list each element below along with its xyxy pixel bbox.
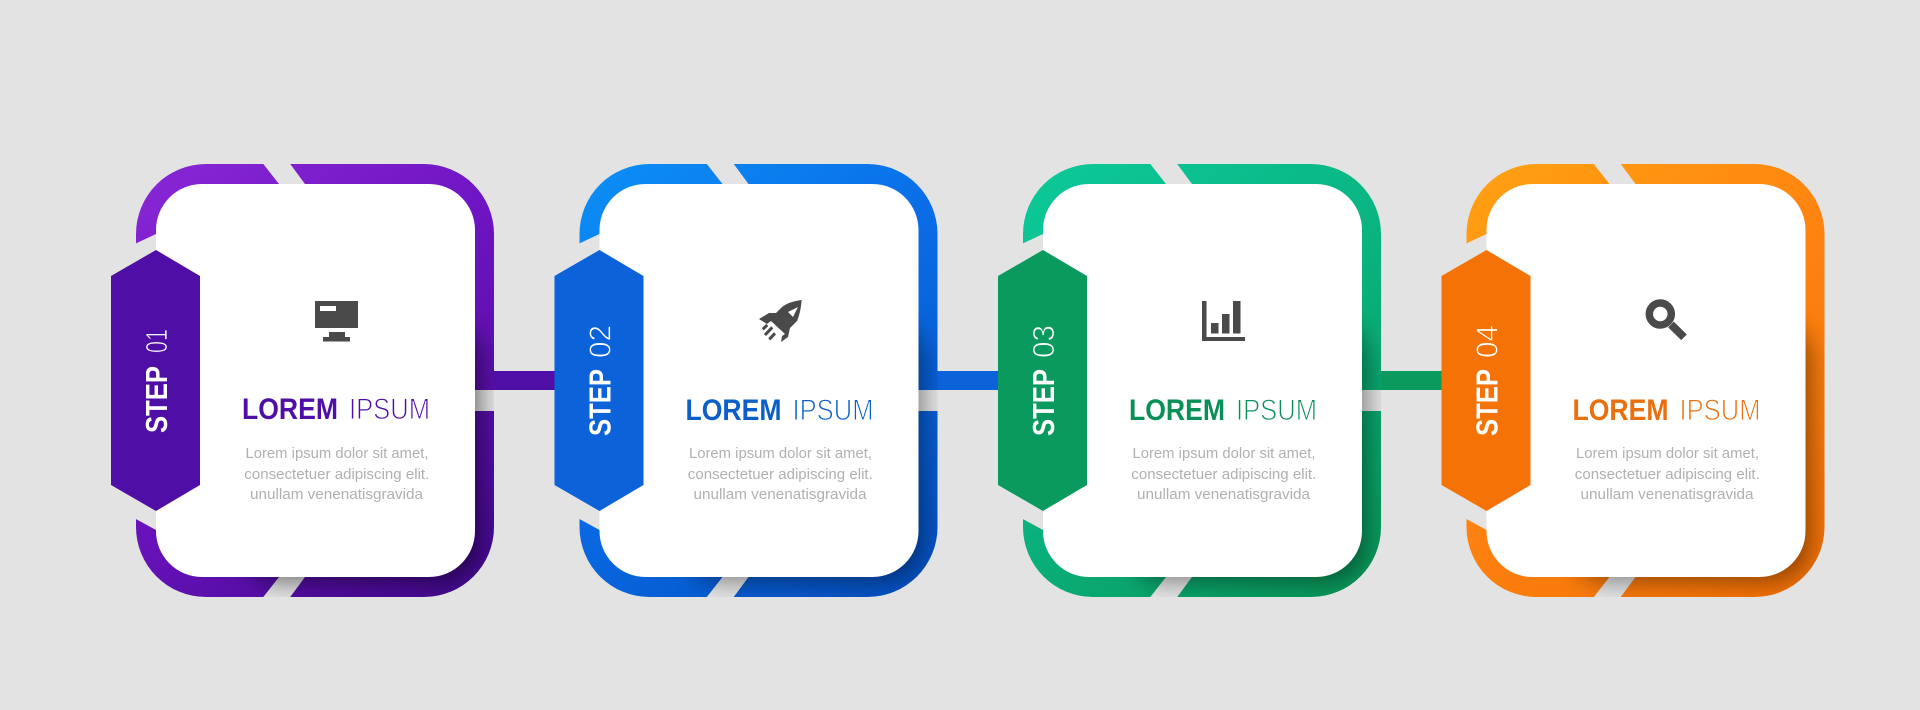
description: step 4: Lorem ipsum dolor sit amet,	[1576, 445, 1759, 462]
description: step 3: unullam venenatisgravida	[1137, 486, 1311, 503]
description: step 4	[1575, 445, 1760, 503]
icon: magnifier	[1649, 303, 1684, 337]
description: step 1: Lorem ipsum dolor sit amet,	[246, 445, 428, 462]
step label: STEP 01: STEP	[139, 366, 174, 433]
description: step 1: unullam venenatisgravida	[250, 486, 424, 503]
title: step 1: IPSUM	[349, 393, 430, 426]
icon: monitor	[315, 301, 358, 342]
title: step 4: IPSUM	[1680, 394, 1760, 427]
frame: step 2	[568, 158, 944, 603]
description: step 4: unullam venenatisgravida	[1580, 486, 1754, 503]
panel: step 4	[1442, 158, 1824, 603]
title: step 4	[1572, 394, 1760, 427]
step label: STEP 02: STEP	[582, 369, 618, 436]
description: step 3: Lorem ipsum dolor sit amet,	[1132, 445, 1316, 462]
connector: step 1 to step 2	[490, 371, 556, 390]
title: step 4: LOREM	[1572, 394, 1668, 427]
connector: step 3 to step 4	[1377, 371, 1443, 390]
frame: step 4	[1456, 158, 1824, 603]
frame: step 3	[1012, 158, 1387, 603]
panel: step 1	[111, 158, 500, 603]
panel: step 2	[554, 158, 944, 603]
description: step 2	[688, 445, 873, 503]
icon: rocket	[759, 300, 802, 342]
hexagon badge: step 4	[1442, 250, 1530, 511]
description: step 1	[244, 445, 429, 503]
card: step 3	[1043, 184, 1362, 577]
hexagon badge: step 3	[998, 250, 1087, 511]
step label: STEP 04: STEP	[1470, 369, 1504, 436]
title: step 1	[242, 393, 430, 426]
step label: STEP 01: 01	[139, 329, 174, 353]
description: step 4: consectetuer adipiscing elit.	[1575, 466, 1760, 483]
frame: step 1	[125, 158, 500, 603]
connector: step 2 to step 3	[934, 371, 1000, 390]
icon: bar chart	[1202, 301, 1245, 341]
card: step 2	[600, 184, 918, 577]
description: step 2: Lorem ipsum dolor sit amet,	[689, 445, 872, 462]
description: step 3	[1131, 445, 1316, 503]
description: step 2: unullam venenatisgravida	[694, 486, 867, 503]
title: step 3	[1129, 394, 1317, 427]
step label: STEP 02: 02	[582, 325, 618, 358]
title: step 2	[686, 394, 874, 427]
description: step 2: consectetuer adipiscing elit.	[688, 466, 873, 483]
panel: step 3	[998, 158, 1387, 603]
title: step 3: LOREM	[1129, 394, 1225, 427]
card: step 4	[1486, 184, 1806, 577]
step label: STEP 03: STEP	[1026, 369, 1061, 436]
hexagon badge: step 1	[111, 250, 200, 511]
step label: STEP 03: 03	[1026, 325, 1061, 358]
title: step 2: LOREM	[686, 394, 782, 427]
title: step 3: IPSUM	[1236, 394, 1317, 427]
title: step 2: IPSUM	[792, 394, 874, 427]
card: step 1	[156, 184, 475, 577]
step label: STEP 04: 04	[1470, 325, 1504, 358]
description: step 3: consectetuer adipiscing elit.	[1131, 466, 1316, 483]
title: step 1: LOREM	[242, 393, 338, 426]
hexagon badge: step 2	[554, 250, 644, 511]
description: step 1: consectetuer adipiscing elit.	[244, 466, 429, 483]
